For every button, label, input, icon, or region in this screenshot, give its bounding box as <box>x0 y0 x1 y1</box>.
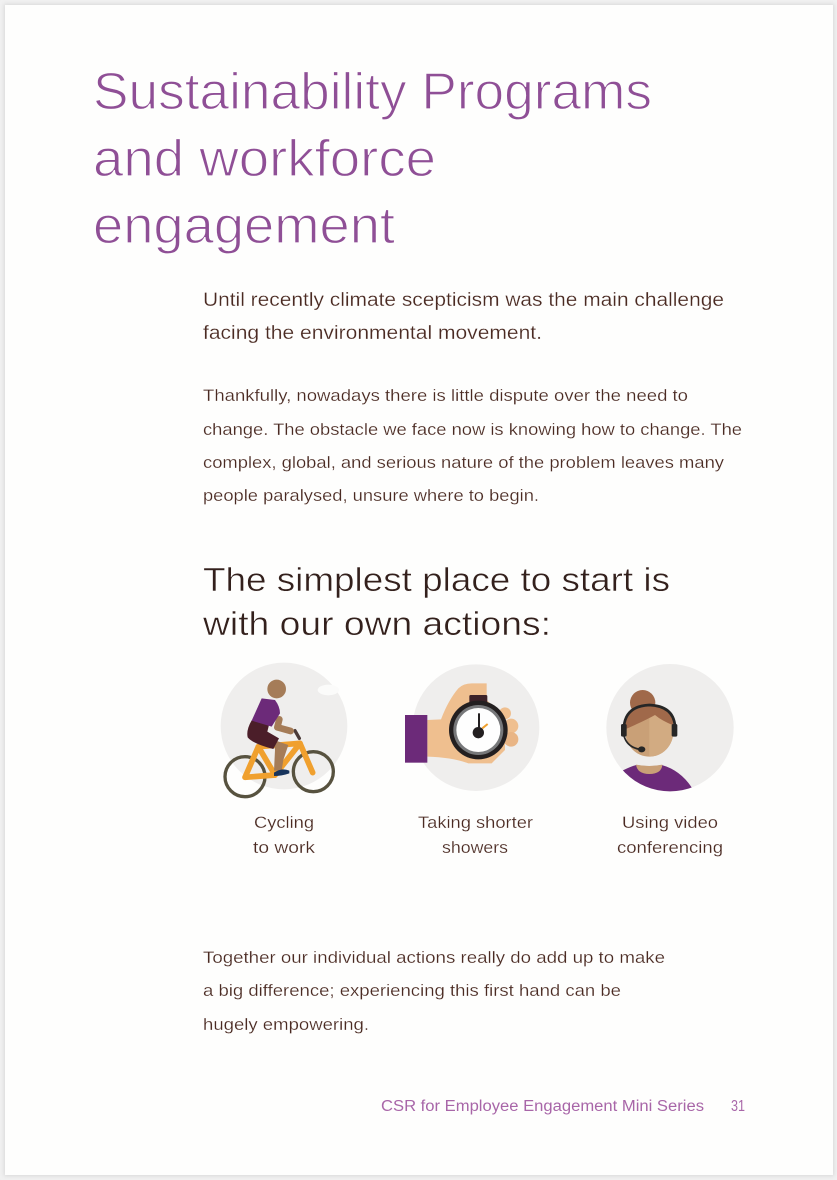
lead paragraph: Until recently climate scepticism was the main challenge <box>203 290 724 311</box>
heading <box>202 562 670 643</box>
icon: sleeve <box>405 715 427 763</box>
caption: showers: Taking shorter <box>418 813 533 832</box>
caption: showers <box>418 813 533 857</box>
closing paragraph: a big difference; experiencing this first hand can be <box>203 982 621 1000</box>
footer: CSR for Employee Engagement Mini Series <box>381 1098 704 1115</box>
closing paragraph: Together our individual actions really do add up to make <box>203 949 665 967</box>
closing paragraph <box>203 949 665 1034</box>
closing paragraph: hugely empowering. <box>203 1016 369 1034</box>
title: and workforce <box>93 130 436 188</box>
title: engagement <box>93 197 396 255</box>
caption: cycling: Cycling <box>254 813 314 832</box>
icon: cyclist <box>221 663 347 797</box>
lead paragraph <box>203 290 724 344</box>
icon: headset user <box>606 664 734 797</box>
title <box>93 63 652 255</box>
footer: 31 <box>731 1098 745 1115</box>
heading: The simplest place to start is <box>203 562 670 599</box>
icon: stopwatch in hand <box>405 664 539 791</box>
caption: showers: showers <box>442 838 508 857</box>
caption: video conferencing: Using video <box>622 813 718 832</box>
title: Sustainability Programs <box>93 63 652 121</box>
lead paragraph: facing the environmental movement. <box>203 323 542 344</box>
caption: cycling: to work <box>253 838 316 857</box>
body paragraph: complex, global, and serious nature of the problem leaves many <box>203 454 725 472</box>
body paragraph <box>203 387 742 505</box>
caption: video conferencing <box>617 813 723 857</box>
heading: with our own actions: <box>202 606 551 643</box>
body paragraph: people paralysed, unsure where to begin. <box>203 487 539 505</box>
body paragraph: change. The obstacle we face now is knowing how to change. The <box>203 421 742 439</box>
caption: cycling <box>253 813 316 857</box>
caption: video conferencing: conferencing <box>617 838 723 857</box>
body paragraph: Thankfully, nowadays there is little dispute over the need to <box>203 387 688 405</box>
